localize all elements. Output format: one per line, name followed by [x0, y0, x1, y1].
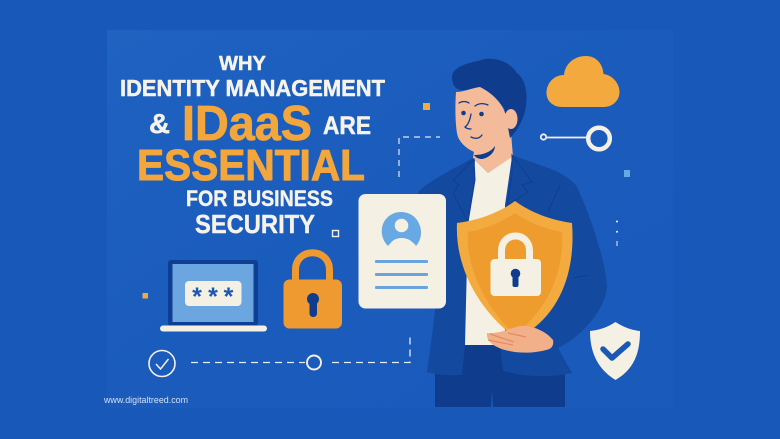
website url: www.digitaltreed.com	[103, 395, 188, 405]
face	[455, 87, 507, 153]
title: ARE	[323, 112, 371, 140]
inner panel	[107, 30, 673, 408]
key connector	[541, 128, 610, 149]
title	[120, 53, 385, 239]
shield with lock	[457, 201, 573, 334]
title: FOR BUSINESS	[186, 186, 333, 211]
cloud icon	[546, 56, 620, 107]
dashed connector bottom	[191, 335, 410, 370]
ear	[504, 109, 518, 129]
title: IDaaS	[182, 97, 312, 151]
laptop	[160, 260, 267, 332]
decorative squares and dots	[142, 103, 630, 298]
title: &	[149, 108, 170, 139]
jacket lapels	[453, 155, 588, 278]
eyes and mouth	[459, 102, 488, 138]
dashed connector top	[399, 137, 440, 177]
hand	[487, 326, 553, 353]
chin shadow	[474, 146, 495, 159]
identity card	[358, 194, 446, 308]
lock icon	[490, 236, 541, 296]
check circle	[149, 350, 175, 376]
title: ESSENTIAL	[137, 141, 365, 190]
neck	[473, 120, 513, 173]
person	[418, 59, 607, 407]
card text lines	[375, 260, 428, 289]
password field: ***	[192, 283, 234, 311]
title: IDENTITY MANAGEMENT	[120, 75, 385, 101]
orange padlock	[284, 253, 342, 328]
title: SECURITY	[195, 209, 315, 239]
trousers	[435, 340, 565, 407]
jacket	[418, 155, 607, 376]
hair	[452, 59, 527, 138]
small shield check	[590, 322, 640, 380]
avatar icon	[382, 212, 421, 247]
shirt	[465, 157, 512, 345]
title: WHY	[219, 53, 267, 75]
